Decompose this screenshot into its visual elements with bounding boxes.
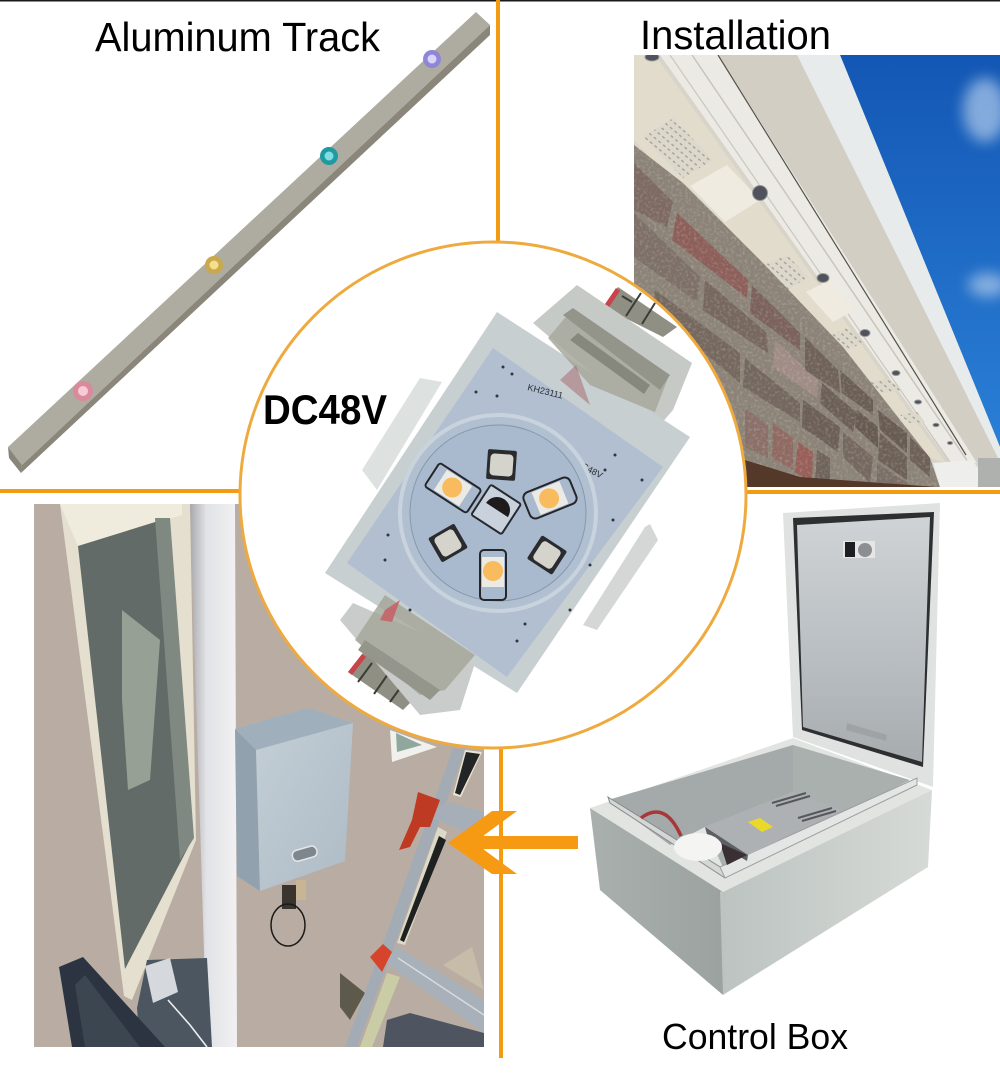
- centre circle: [240, 242, 746, 748]
- body right face: [720, 790, 932, 995]
- red cable ring: [641, 812, 681, 836]
- connector block top: [548, 308, 670, 412]
- LED: amber top-right: [522, 476, 578, 520]
- installed light points: [645, 53, 952, 444]
- rail: [345, 748, 465, 1047]
- interior back-left wall: [608, 745, 793, 845]
- wires top: [603, 287, 677, 337]
- lower rung: [382, 947, 484, 1033]
- stucco wall: [34, 504, 484, 1047]
- module: DC48V LED pixel: [325, 285, 692, 715]
- module: DC48V LED pixel: DC48V: [574, 458, 604, 480]
- cable loop: [271, 880, 306, 946]
- fascia: [797, 55, 1000, 462]
- LED: white left: [428, 523, 468, 563]
- wall outlet: [340, 973, 365, 1020]
- perforated vents: [643, 118, 925, 423]
- LED: yellow: [205, 256, 223, 274]
- sky: [840, 55, 1000, 447]
- window glass: [78, 518, 193, 969]
- LED: teal: [320, 147, 338, 165]
- aluminium channel: [660, 55, 977, 463]
- clouds: [963, 78, 1000, 297]
- power adapter: [145, 958, 207, 1047]
- interior back-right wall and floor: [705, 745, 910, 872]
- label: DC48V: DC48V: [263, 386, 387, 433]
- beige object behind rung: [443, 947, 484, 990]
- PCB print: KH23111: [527, 382, 564, 401]
- label strip lower: [397, 827, 447, 945]
- lens ring: [400, 415, 596, 611]
- heading: Aluminum Track: Aluminum Track: [95, 14, 380, 60]
- white disc: [674, 833, 722, 861]
- photo: open control box: [590, 503, 940, 995]
- connector block bottom: [355, 595, 475, 700]
- clear housing connector bumps: [533, 285, 692, 425]
- LED: amber top-left: [424, 463, 482, 513]
- lid: [783, 503, 940, 787]
- heading: Control Box: Control Box: [662, 1016, 848, 1057]
- label strip upper: [453, 750, 482, 797]
- side clips: [362, 378, 442, 490]
- window frame: [60, 504, 196, 1000]
- LED: white top: [486, 449, 517, 481]
- LED: violet: [423, 50, 441, 68]
- metal rails: [608, 797, 725, 878]
- red clamp lower: [370, 944, 392, 972]
- clear housing: [325, 312, 690, 693]
- centre chip: [471, 485, 521, 534]
- wires bottom: [348, 653, 420, 710]
- PCB via dots: [384, 366, 644, 642]
- ladder: [340, 748, 484, 1047]
- upper rung: [440, 802, 484, 832]
- box handle: [291, 845, 318, 862]
- soffit panels: [634, 55, 945, 462]
- heading: Installation: Installation: [640, 12, 831, 58]
- rim: [590, 738, 932, 892]
- body left face: [590, 808, 723, 995]
- top edge strip: [0, 0, 1000, 2]
- small window: [390, 730, 437, 762]
- wall box: [235, 708, 353, 891]
- dark bench: [59, 957, 212, 1047]
- gutter: [933, 460, 978, 487]
- LED: white right: [527, 535, 567, 575]
- lid latch: [843, 541, 875, 558]
- LED: amber bottom: [480, 550, 506, 600]
- aluminum track with coloured LEDs: [8, 12, 490, 473]
- power supply: [705, 792, 842, 865]
- bottom ornaments: [383, 1013, 484, 1047]
- yellow label: [748, 818, 773, 832]
- photo: soffit installation: [634, 53, 1000, 490]
- lid handle: [846, 723, 887, 741]
- LED: pink: [73, 381, 93, 401]
- photo: wall-mounted control box: [34, 504, 484, 1047]
- red clamp upper: [399, 792, 440, 850]
- brick wall: [634, 140, 954, 490]
- arrow pointing to control box: [448, 811, 578, 874]
- downspout: [190, 504, 237, 1047]
- PCB: [347, 348, 663, 677]
